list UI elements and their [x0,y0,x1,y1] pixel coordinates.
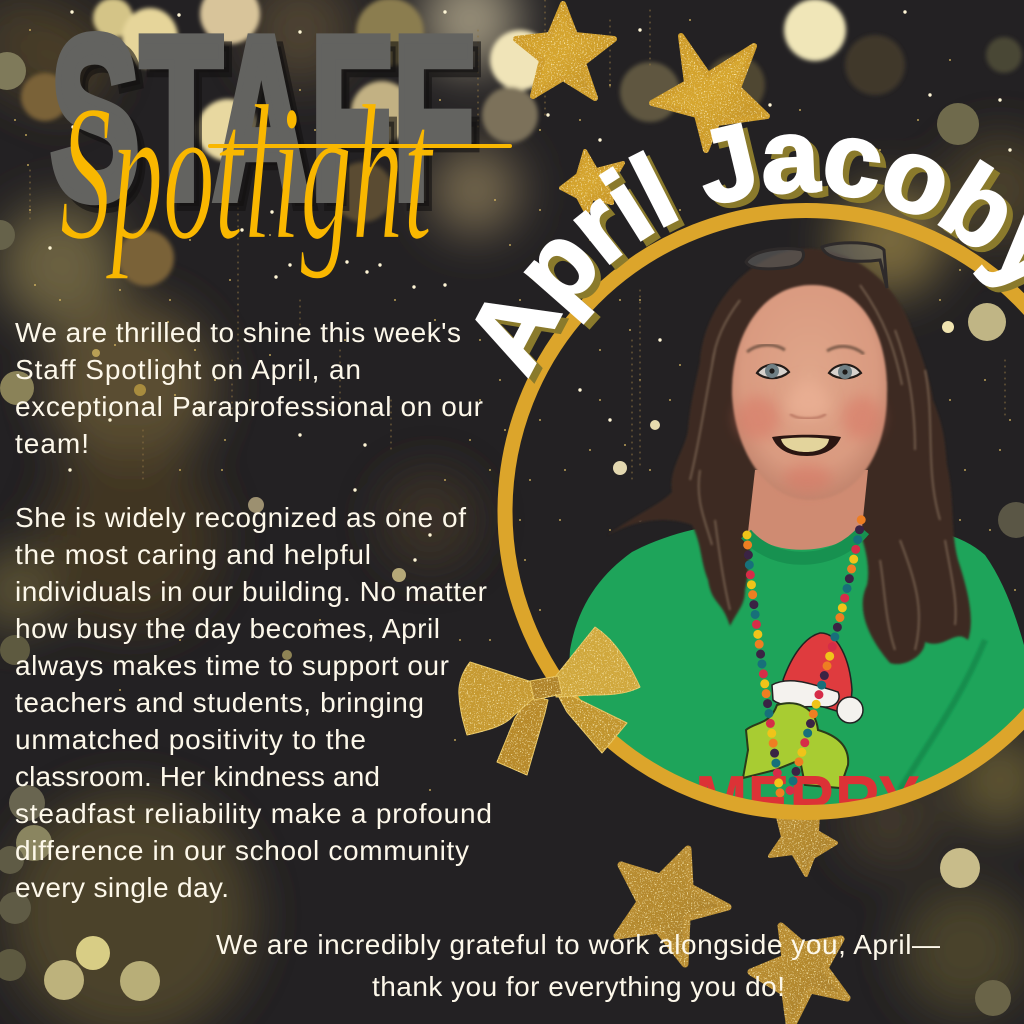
Spotlight word: Spotlight [60,65,434,281]
glasses on head [746,243,887,288]
nose [792,389,824,414]
gold glitter specks [15,0,1020,790]
Spotlight crossbar flourish [210,144,510,148]
star: bottom centre large [617,849,728,964]
portrait photo in circle [560,243,1024,842]
closing thank-you message [216,929,940,1002]
face [732,285,887,500]
neck [748,470,868,550]
body text: intro paragraph [15,317,483,459]
shirt shading [900,640,985,790]
eyebrows [747,345,864,354]
closing thank-you message: We are incredibly grateful to work alongside you, April— [216,929,940,960]
bow knot [530,676,562,700]
bow left tail [497,695,548,775]
gold circle ring [505,210,1024,812]
star: top middle [652,36,767,150]
star: below ring small [770,813,836,875]
soft bokeh discs [21,0,1022,286]
star: small under name [561,151,623,214]
body text: description paragraph: teachers and students, bringing [15,687,424,718]
right eye [829,365,861,379]
star: top left [516,4,614,98]
grinch graphic [699,632,919,805]
shirt collar [746,530,864,558]
body text: description paragraph: how busy the day becomes, April [15,613,440,644]
body text: description paragraph: every single day. [15,872,229,903]
body text: description paragraph: She is widely recognized as one of [15,502,466,533]
santa hat [783,633,852,715]
star: bottom right [751,926,847,1024]
bead necklace [747,515,862,800]
heading: STAFF [50,0,483,256]
body text: intro paragraph: We are thrilled to shine this week's [15,317,461,348]
closing thank-you message: thank you for everything you do! [372,971,785,1002]
name: April Jacoby curved [475,122,1024,384]
body text: description paragraph: always makes time to support our [15,650,449,681]
bow right loop [555,627,640,697]
body text: description paragraph: unmatched positivity to the [15,724,366,755]
hat trim and pompom [772,681,863,723]
body text: intro paragraph: team! [15,428,89,459]
hair highlights [690,285,956,650]
body text: description paragraph: the most caring and helpful [15,539,371,570]
left eye [757,364,789,378]
body text: description paragraph: difference in our school community [15,835,469,866]
STAFF drop shadow: STAFF [58,0,483,256]
body text: description paragraph: individuals in our building. No matter [15,576,487,607]
body text: description paragraph [15,502,492,903]
green face and fur [743,703,848,788]
cheeks blush [736,396,882,492]
nose underside [790,414,826,418]
body text: description paragraph: steadfast reliability make a profound [15,798,492,829]
t-shirt [570,529,1024,805]
icon: gold glitter bow [459,627,640,775]
body text: description paragraph: classroom. Her kindness and [15,761,380,792]
body text: intro paragraph: Staff Spotlight on April, an [15,354,361,385]
mouth and teeth [772,435,841,456]
bow right tail [555,690,627,753]
body text: intro paragraph: exceptional Paraprofessional on our [15,391,483,422]
bow left loop [459,662,535,735]
hair [606,249,971,664]
MERRY lettering: MERRY [695,762,920,842]
